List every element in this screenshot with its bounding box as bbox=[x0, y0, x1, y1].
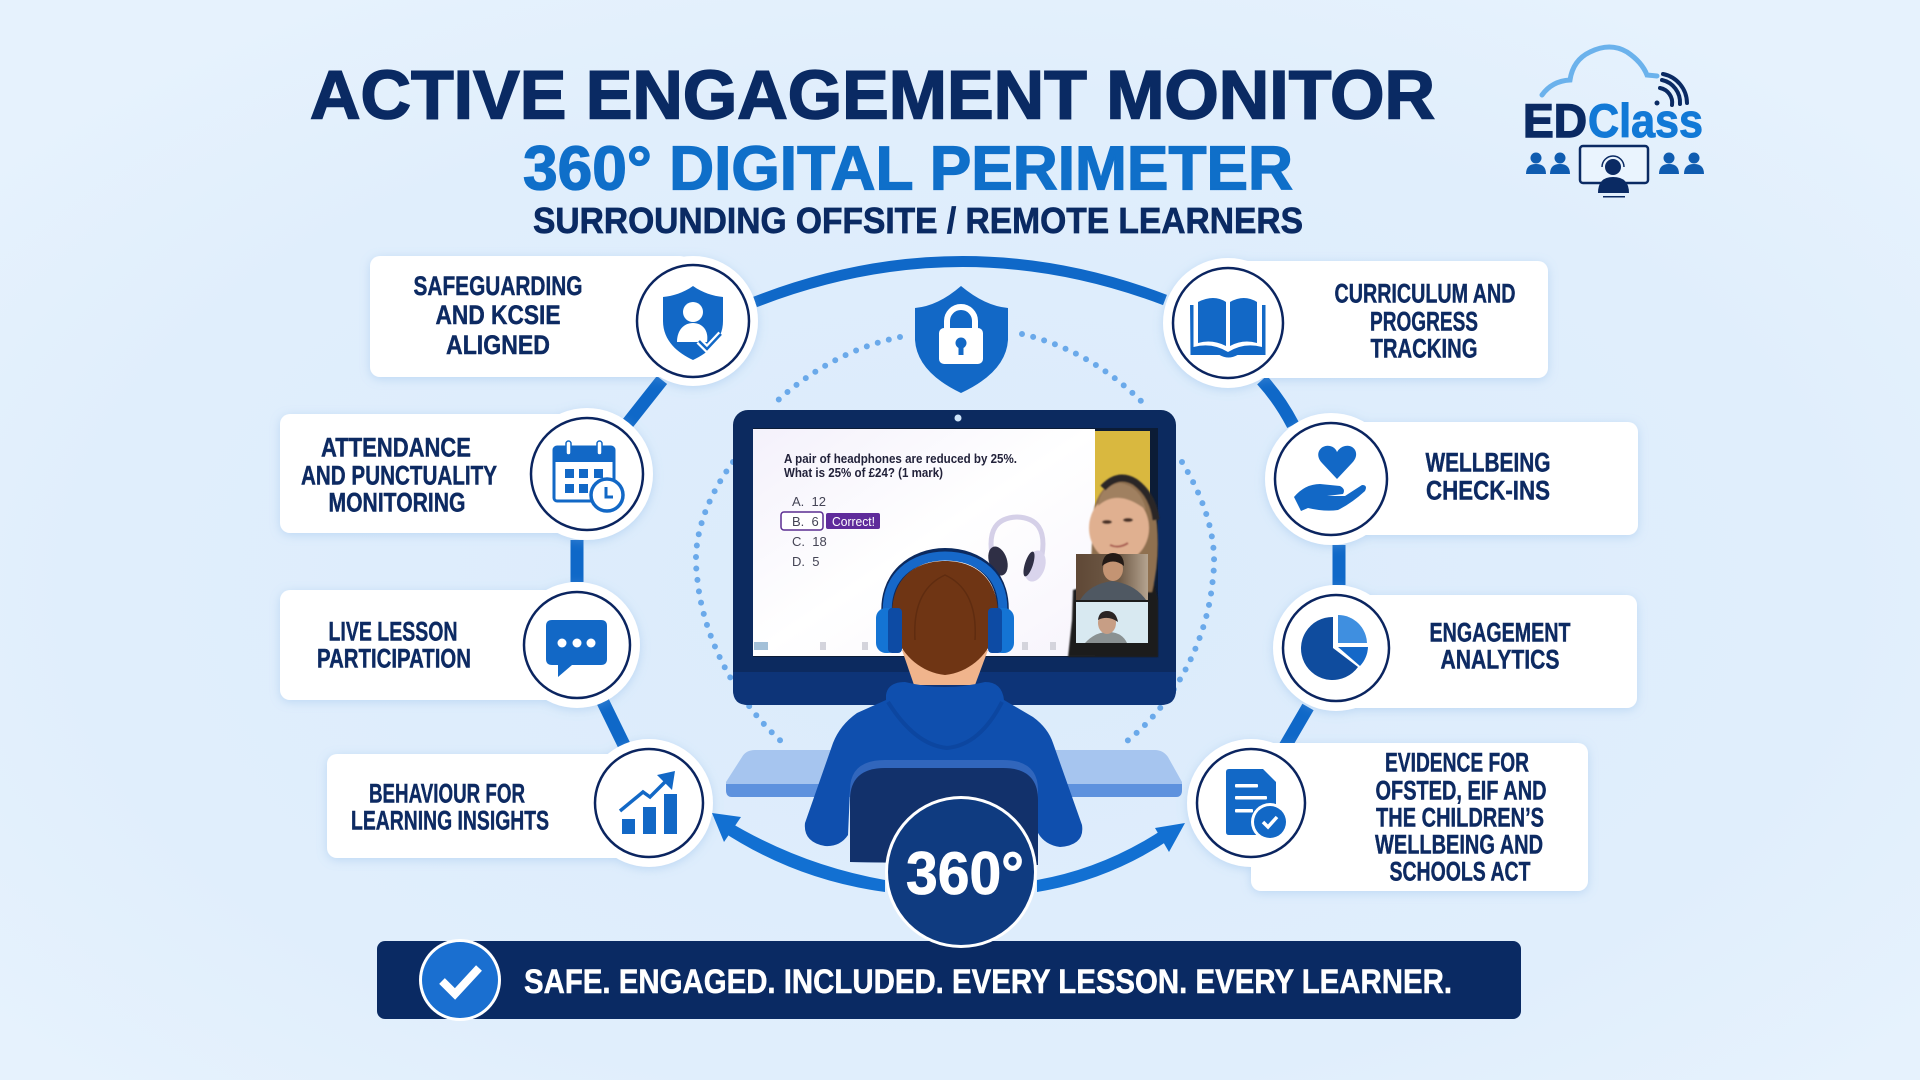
banner text: SAFE. ENGAGED. INCLUDED. EVERY LESSON. EVERY LEARNER. bbox=[524, 963, 1452, 1001]
picture: headphones on screen bbox=[985, 517, 1049, 584]
quiz options: A. 12 bbox=[792, 494, 826, 509]
label bbox=[414, 271, 582, 360]
label: CURRICULUM AND bbox=[1334, 278, 1516, 308]
panel: safeguarding bbox=[370, 256, 758, 386]
icon: calendar with clock bbox=[554, 441, 623, 511]
icon: pie chart bbox=[1301, 615, 1368, 680]
screen bbox=[753, 428, 1158, 657]
label: PROGRESS bbox=[1370, 306, 1478, 336]
quiz options: C. 18 bbox=[792, 534, 827, 549]
label: OFSTED, EIF AND bbox=[1376, 776, 1546, 806]
quiz options bbox=[781, 494, 880, 569]
quiz question bbox=[784, 451, 1017, 480]
banner bbox=[377, 939, 1521, 1021]
monitor bbox=[733, 410, 1176, 705]
label: LEARNING INSIGHTS bbox=[351, 806, 549, 836]
badge: 360: 360° bbox=[906, 840, 1024, 907]
label: ALIGNED bbox=[446, 330, 550, 360]
dotted perimeter ring bbox=[696, 334, 1214, 745]
title: ACTIVE ENGAGEMENT MONITOR bbox=[310, 56, 1435, 134]
label: PARTICIPATION bbox=[317, 644, 471, 674]
label: THE CHILDREN’S bbox=[1376, 802, 1544, 832]
tagline: SURROUNDING OFFSITE / REMOTE LEARNERS bbox=[533, 200, 1303, 241]
label: ATTENDANCE bbox=[321, 432, 471, 462]
label: ENGAGEMENT bbox=[1430, 618, 1571, 648]
icon: open book bbox=[1190, 298, 1266, 358]
quiz question: What is 25% of £24? (1 mark) bbox=[784, 465, 943, 480]
quiz options: D. 5 bbox=[792, 554, 819, 569]
ear cups bbox=[876, 608, 898, 653]
video: teacher bbox=[1068, 478, 1158, 657]
label: WELLBEING AND bbox=[1375, 830, 1543, 860]
label bbox=[1426, 448, 1550, 506]
panel: live lesson bbox=[280, 582, 640, 708]
panel: behaviour bbox=[327, 739, 713, 867]
student at desk bbox=[805, 554, 1082, 865]
label: AND KCSIE bbox=[436, 300, 560, 330]
label bbox=[351, 778, 549, 836]
quiz options: B. 6 bbox=[792, 514, 819, 529]
desk bbox=[726, 750, 1182, 797]
toolbar icons bbox=[754, 642, 1056, 650]
video: student two bbox=[1076, 602, 1148, 643]
panel: analytics bbox=[1273, 585, 1637, 711]
label: CHECK-INS bbox=[1426, 476, 1550, 506]
head bbox=[892, 561, 998, 675]
label: SCHOOLS ACT bbox=[1390, 856, 1531, 886]
label: MONITORING bbox=[328, 488, 466, 518]
quiz options: Correct! bbox=[832, 514, 875, 529]
label: WELLBEING bbox=[1426, 448, 1550, 478]
panel: curriculum bbox=[1163, 258, 1548, 388]
panel: attendance bbox=[280, 408, 653, 540]
icon: rising bar chart bbox=[620, 771, 677, 834]
subtitle: 360° DIGITAL PERIMETER bbox=[523, 134, 1293, 204]
arrow: left bbox=[712, 813, 885, 892]
label bbox=[301, 432, 497, 518]
icon: check badge bbox=[419, 939, 501, 1021]
headphones band bbox=[887, 554, 1003, 620]
icon: chat bubble bbox=[546, 620, 607, 677]
label: AND PUNCTUALITY bbox=[301, 460, 497, 490]
label: LIVE LESSON bbox=[328, 616, 458, 646]
arrow: right bbox=[1037, 823, 1185, 892]
icon: padlock shield bbox=[915, 286, 1008, 393]
video: student one bbox=[1076, 553, 1148, 600]
logo: EDClass: ED bbox=[1523, 94, 1587, 147]
label: SAFEGUARDING bbox=[414, 271, 582, 301]
icon: shield with user bbox=[663, 286, 723, 360]
label: TRACKING bbox=[1370, 334, 1478, 364]
ring: connecting segments bbox=[577, 261, 1339, 750]
label: EVIDENCE FOR bbox=[1385, 748, 1529, 778]
label bbox=[317, 616, 471, 674]
label: ANALYTICS bbox=[1440, 644, 1560, 674]
logo: EDClass bbox=[1523, 47, 1704, 198]
label bbox=[1375, 748, 1546, 886]
hoodie bbox=[805, 682, 1082, 847]
label bbox=[1430, 618, 1571, 674]
neck bbox=[902, 650, 988, 685]
icon: heart in hand bbox=[1294, 446, 1366, 511]
label bbox=[1334, 278, 1516, 364]
panel: evidence bbox=[1187, 739, 1588, 891]
chair bbox=[850, 760, 1038, 865]
quiz question: A pair of headphones are reduced by 25%. bbox=[784, 451, 1017, 466]
icon: document with check bbox=[1226, 769, 1289, 841]
label: BEHAVIOUR FOR bbox=[369, 778, 525, 808]
title block bbox=[310, 56, 1435, 241]
logo: EDClass: Class bbox=[1588, 94, 1703, 147]
panel: wellbeing bbox=[1265, 413, 1638, 545]
badge: 360 bbox=[885, 796, 1037, 948]
